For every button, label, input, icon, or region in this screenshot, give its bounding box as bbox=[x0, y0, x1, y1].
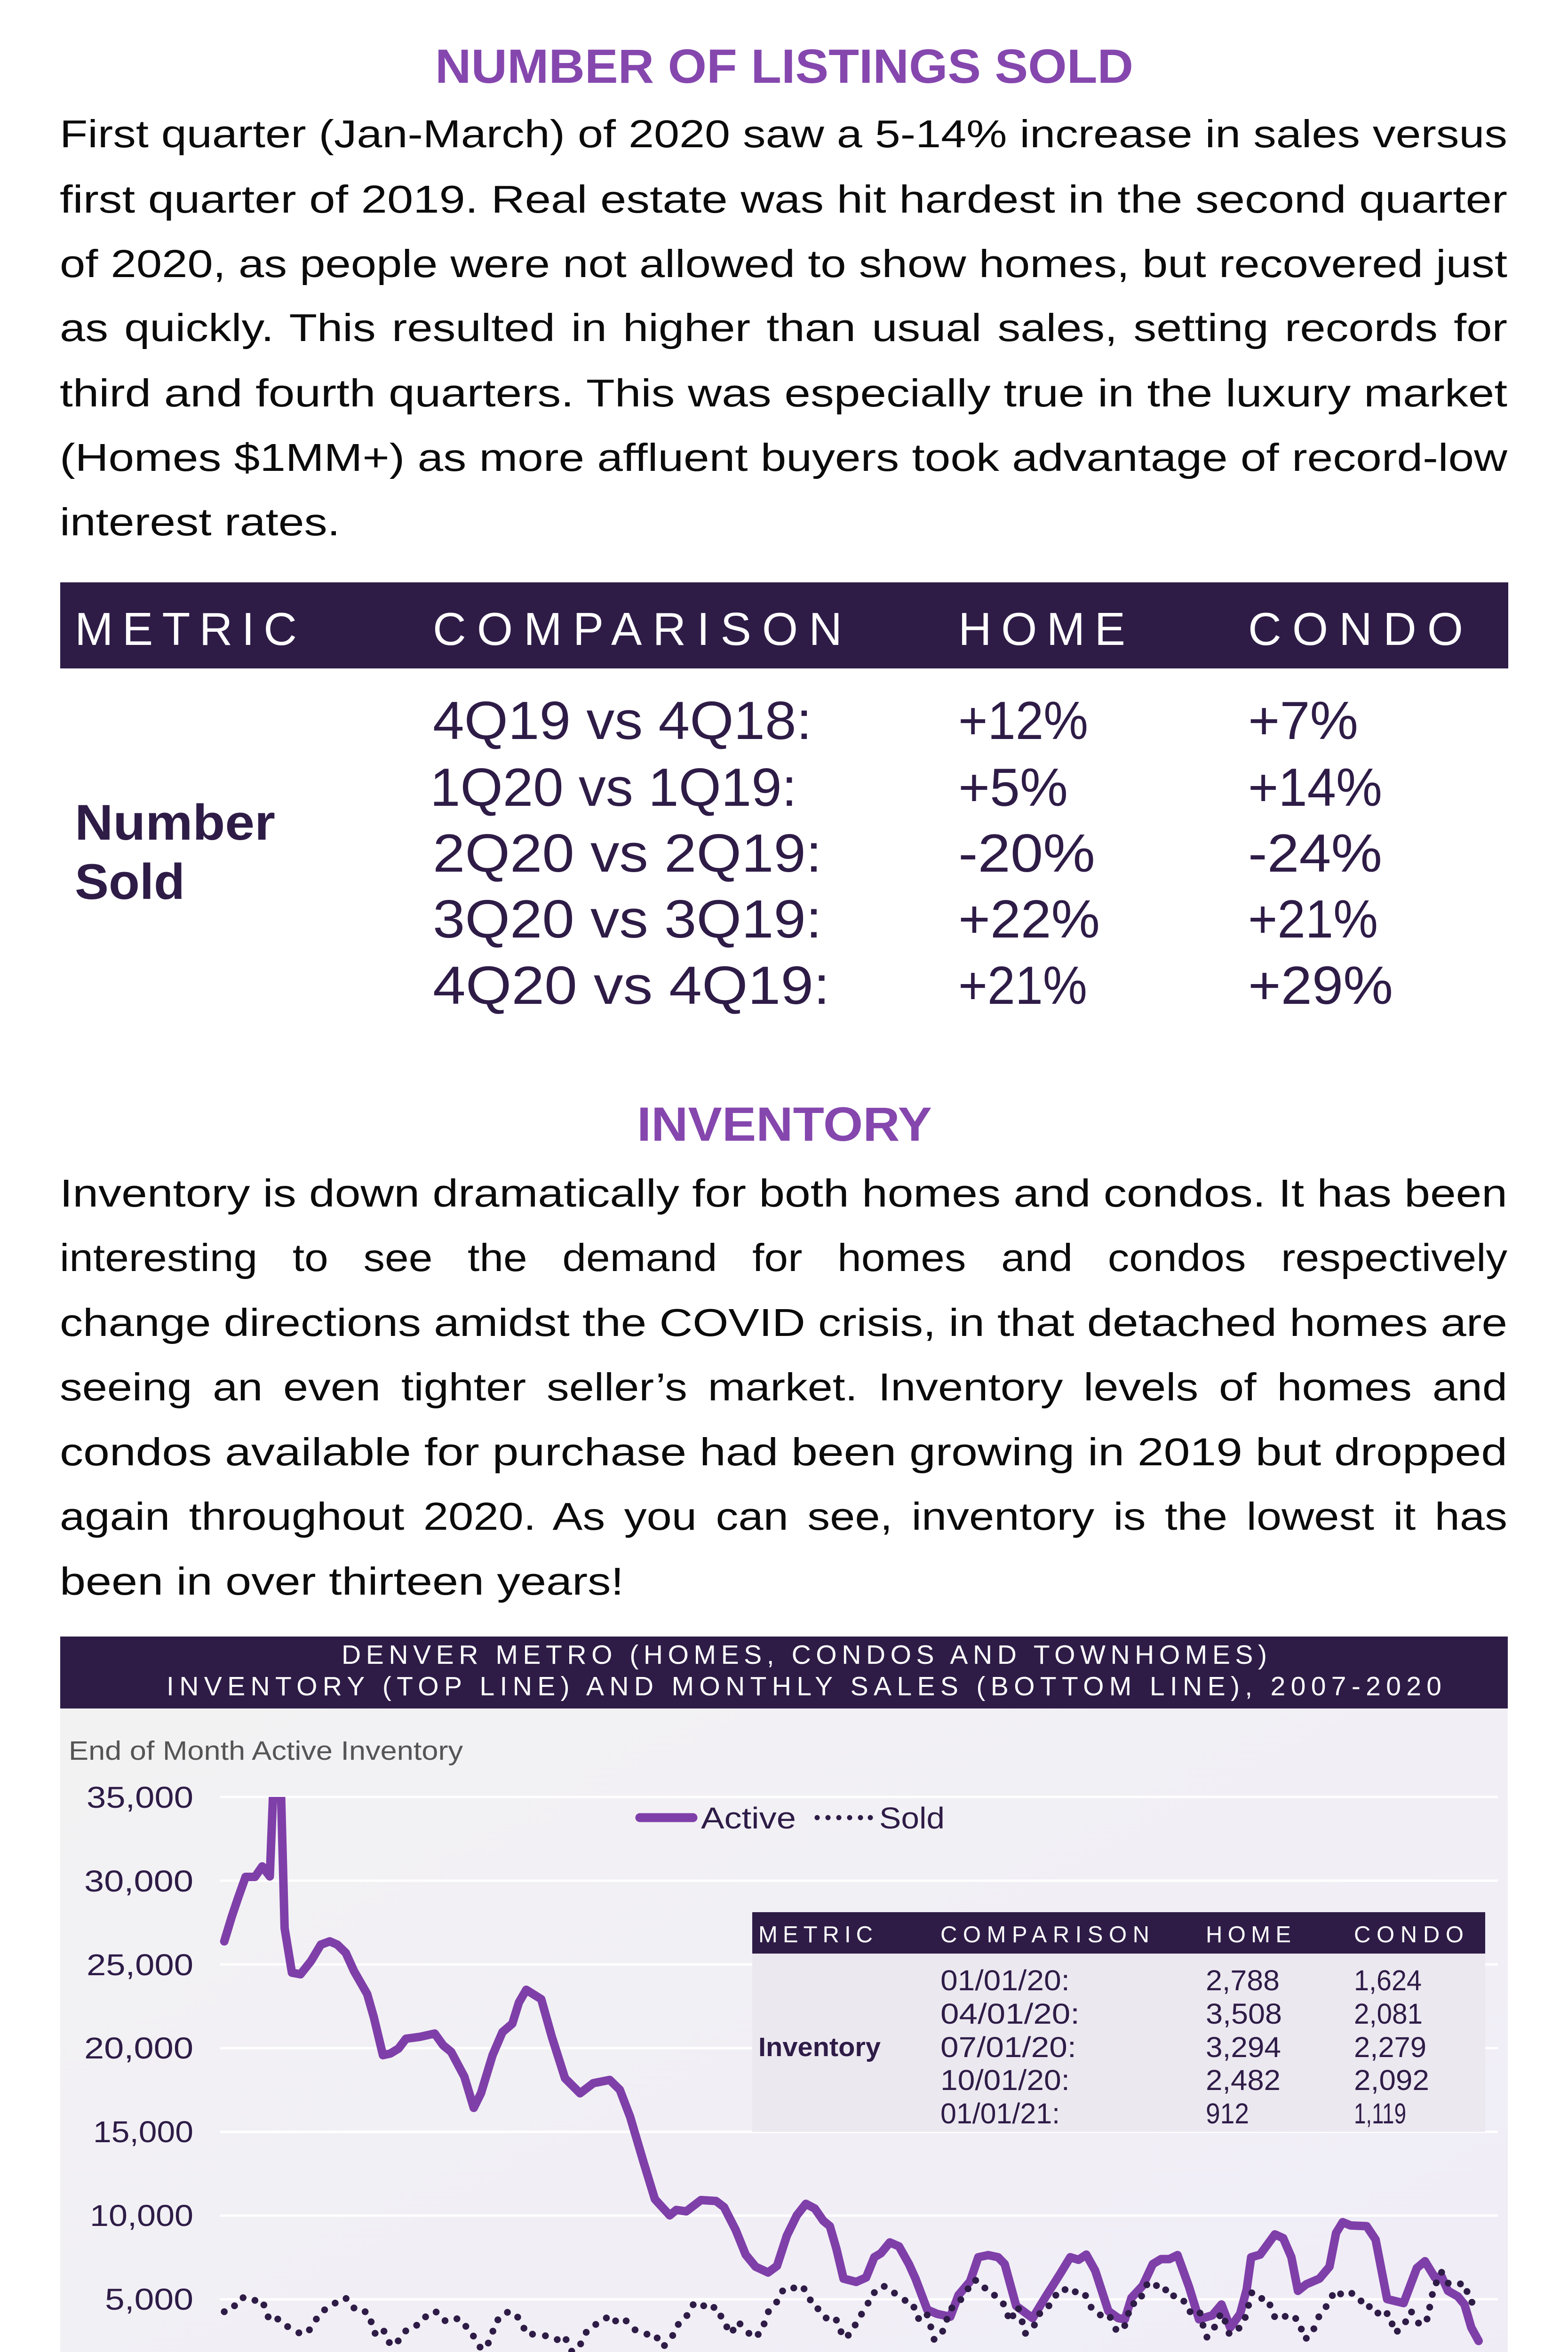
inset table: inventory comparison bbox=[752, 1912, 1485, 2132]
column: comparison periods: 4Q19 vs 4Q18: bbox=[433, 691, 812, 751]
text block: inventory description: Inventory is down dramatically for both homes and condos. It has been bbox=[60, 1171, 1507, 1215]
inset table header: CONDO bbox=[1354, 1922, 1464, 1947]
chart header bar: DENVER METRO (HOMES, CONDOS AND TOWNHOMES) bbox=[342, 1640, 1267, 1670]
inset column: dates: 07/01/20: bbox=[940, 2031, 1076, 2063]
y axis labels: 5,000 bbox=[105, 2282, 193, 2316]
column: condo values: +21% bbox=[1248, 890, 1378, 949]
column: comparison periods: 4Q20 vs 4Q19: bbox=[433, 956, 830, 1016]
table header bar: COMPARISON bbox=[433, 603, 842, 655]
column: home values: +12% bbox=[958, 691, 1088, 751]
inset column: dates: 01/01/20: bbox=[940, 1964, 1070, 1996]
table header bar: CONDO bbox=[1248, 603, 1463, 655]
y axis labels bbox=[84, 1780, 193, 2352]
column: comparison periods: 3Q20 vs 3Q19: bbox=[433, 890, 822, 949]
legend: Sold bbox=[879, 1801, 945, 1835]
inset column: home values: 2,788 bbox=[1206, 1964, 1280, 1996]
text block: inventory description bbox=[60, 1171, 1508, 1603]
text block: listings sold description: of 2020, as people were not allowed to show homes, but recovered just bbox=[60, 242, 1507, 286]
y axis labels: 25,000 bbox=[87, 1948, 193, 1982]
inset column: condo values: 2,081 bbox=[1354, 1998, 1423, 2030]
text block: inventory description: change directions amidst the COVID crisis, in that detached homes are bbox=[60, 1301, 1507, 1344]
column: condo values: +14% bbox=[1248, 758, 1382, 818]
y axis labels: 35,000 bbox=[87, 1780, 193, 1814]
row label: number sold: Sold bbox=[75, 853, 185, 910]
inset column: dates bbox=[940, 1964, 1080, 2130]
column: comparison periods: 2Q20 vs 2Q19: bbox=[433, 824, 822, 883]
inset table body background bbox=[752, 1954, 1485, 2132]
panel: inventory chart bbox=[60, 1637, 1508, 2352]
column: home values: +22% bbox=[958, 890, 1100, 949]
column: home values: +5% bbox=[958, 758, 1068, 818]
inset column: dates: 04/01/20: bbox=[940, 1998, 1080, 2030]
y axis labels: 20,000 bbox=[84, 2031, 193, 2065]
column: condo values: +29% bbox=[1248, 956, 1393, 1016]
text block: inventory description: been in over thirteen years! bbox=[60, 1559, 624, 1603]
text block: listings sold description: first quarter of 2019. Real estate was hit hardest in the second quarter bbox=[60, 177, 1507, 221]
inset column: condo values: 2,279 bbox=[1354, 2031, 1426, 2063]
inset table header: COMPARISON bbox=[940, 1922, 1149, 1947]
row label: number sold bbox=[75, 794, 275, 910]
chart header bar bbox=[60, 1637, 1508, 1708]
table header bar: METRIC bbox=[75, 603, 297, 655]
line: active inventory bbox=[224, 1788, 1479, 2341]
table header bar bbox=[60, 582, 1508, 668]
inset column: home values: 3,508 bbox=[1206, 1998, 1282, 2030]
text block: listings sold description: First quarter (Jan-March) of 2020 saw a 5-14% increase in sales versus bbox=[60, 112, 1507, 156]
inset column: home values: 3,294 bbox=[1206, 2031, 1281, 2063]
text block: inventory description: condos available for purchase had been growing in 2019 but dropped bbox=[60, 1430, 1507, 1474]
text block: listings sold description: interest rates. bbox=[60, 500, 340, 544]
inset table header bbox=[752, 1912, 1485, 1954]
inset table header: HOME bbox=[1206, 1922, 1291, 1947]
text block: listings sold description: (Homes $1MM+) as more affluent buyers took advantage of record-low bbox=[60, 436, 1508, 479]
heading: inventory: INVENTORY bbox=[637, 1097, 932, 1151]
heading: number of listings sold: NUMBER OF LISTINGS SOLD bbox=[435, 40, 1133, 93]
column: condo values: +7% bbox=[1248, 691, 1358, 751]
y axis labels: 10,000 bbox=[90, 2199, 193, 2233]
axis title: End of Month Active Inventory bbox=[69, 1736, 463, 1766]
column: condo values bbox=[1248, 691, 1393, 1016]
chart header bar: INVENTORY (TOP LINE) AND MONTHLY SALES (BOTTOM LINE), 2007-2020 bbox=[167, 1671, 1441, 1701]
inset row label: inventory: Inventory bbox=[758, 2032, 881, 2062]
chart background bbox=[60, 1708, 1508, 2352]
column: home values bbox=[958, 691, 1100, 1016]
inset column: condo values: 1,119 bbox=[1354, 2098, 1406, 2130]
inset table header: METRIC bbox=[758, 1922, 873, 1947]
inset column: condo values: 1,624 bbox=[1354, 1964, 1422, 1996]
table: number sold comparison bbox=[60, 582, 1508, 1016]
inset column: home values: 2,482 bbox=[1206, 2064, 1281, 2096]
line: monthly sold dots bbox=[224, 2273, 1472, 2351]
text block: listings sold description bbox=[60, 112, 1508, 544]
inset column: home values: 912 bbox=[1206, 2098, 1249, 2130]
text block: inventory description: seeing an even tighter seller’s market. Inventory levels of homes and bbox=[60, 1365, 1507, 1409]
row label: number sold: Number bbox=[75, 794, 275, 850]
inset column: condo values bbox=[1354, 1964, 1429, 2130]
inset column: dates: 01/01/21: bbox=[940, 2098, 1060, 2130]
text block: listings sold description: third and fourth quarters. This was especially true in the luxury market bbox=[60, 371, 1507, 415]
legend bbox=[640, 1801, 945, 1835]
inset column: home values bbox=[1206, 1964, 1282, 2130]
inset column: condo values: 2,092 bbox=[1354, 2064, 1429, 2096]
inset column: dates: 10/01/20: bbox=[940, 2064, 1070, 2096]
column: condo values: -24% bbox=[1248, 824, 1382, 883]
text block: inventory description: interesting to see the demand for homes and condos respectively bbox=[60, 1236, 1508, 1279]
text block: inventory description: again throughout 2020. As you can see, inventory is the lowest it has bbox=[60, 1494, 1507, 1538]
table header bar: HOME bbox=[958, 603, 1125, 655]
y axis labels: 15,000 bbox=[93, 2115, 193, 2149]
column: comparison periods bbox=[430, 691, 830, 1016]
legend: Active bbox=[701, 1801, 796, 1835]
column: home values: +21% bbox=[958, 956, 1087, 1016]
text block: listings sold description: as quickly. This resulted in higher than usual sales, setting records for bbox=[60, 306, 1507, 350]
y axis labels: 30,000 bbox=[84, 1864, 193, 1898]
column: comparison periods: 1Q20 vs 1Q19: bbox=[430, 758, 797, 818]
column: home values: -20% bbox=[958, 824, 1095, 883]
